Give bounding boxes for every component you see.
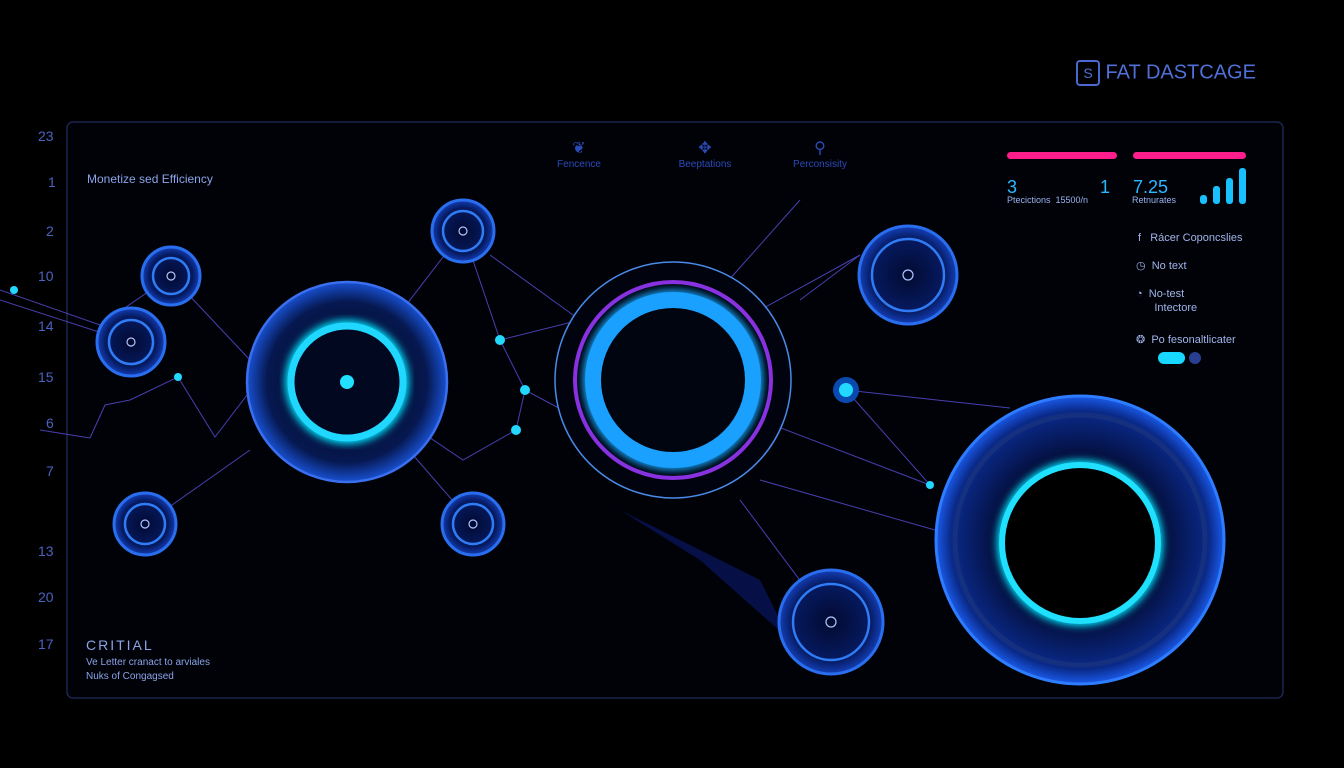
text: 10 [38, 268, 54, 284]
stats panel: f Rácer Coponcslies [1138, 232, 1243, 244]
stats panel: 3 [1007, 177, 1017, 197]
text: Beeptations [679, 159, 731, 170]
glow dots [10, 286, 934, 489]
text: 6 [46, 415, 54, 431]
text: 23 [38, 128, 54, 144]
network lines [0, 200, 1040, 622]
stats panel: ◔ No-test [1136, 288, 1184, 300]
text: Fencence [557, 159, 601, 170]
text: 15 [38, 369, 54, 385]
bar icon [1200, 168, 1246, 204]
stats panel: ◷ No text [1136, 260, 1187, 272]
logo: S [1083, 65, 1093, 81]
text: Ve Letter cranact to arviales [86, 657, 210, 668]
text: 1 [48, 174, 56, 190]
text: ❦ [572, 140, 586, 157]
text: 20 [38, 589, 54, 605]
text: ⚲ [814, 140, 826, 157]
stats panel: Retnurates [1132, 195, 1176, 205]
center circle [555, 262, 791, 498]
stats panel: 1 [1100, 177, 1110, 197]
stats panel: Intectore [1154, 302, 1197, 314]
text: 7 [46, 463, 54, 479]
text: 14 [38, 318, 54, 334]
text: ✥ [698, 140, 712, 157]
bottom right circle [936, 396, 1224, 684]
text: 13 [38, 543, 54, 559]
text: Perconsisity [793, 159, 847, 170]
logo: FAT DASTCAGE [1106, 61, 1256, 83]
text: Nuks of Congagsed [86, 671, 174, 682]
text: 2 [46, 223, 54, 239]
small nodes [97, 200, 957, 674]
left big circle [247, 282, 447, 482]
panel frame [67, 122, 1283, 698]
subtitle: Monetize sed Efficiency [87, 172, 213, 186]
axis labels [38, 128, 56, 652]
critical note: CRITIAL [86, 637, 154, 653]
text: 17 [38, 636, 54, 652]
top icon labels [557, 140, 847, 170]
stats panel: ❂ Po fesonaltlicater [1136, 334, 1236, 346]
stats panel: 7.25 [1133, 177, 1168, 197]
stats panel [1007, 152, 1246, 364]
stats panel: Ptecictions 15500/n [1007, 195, 1088, 205]
